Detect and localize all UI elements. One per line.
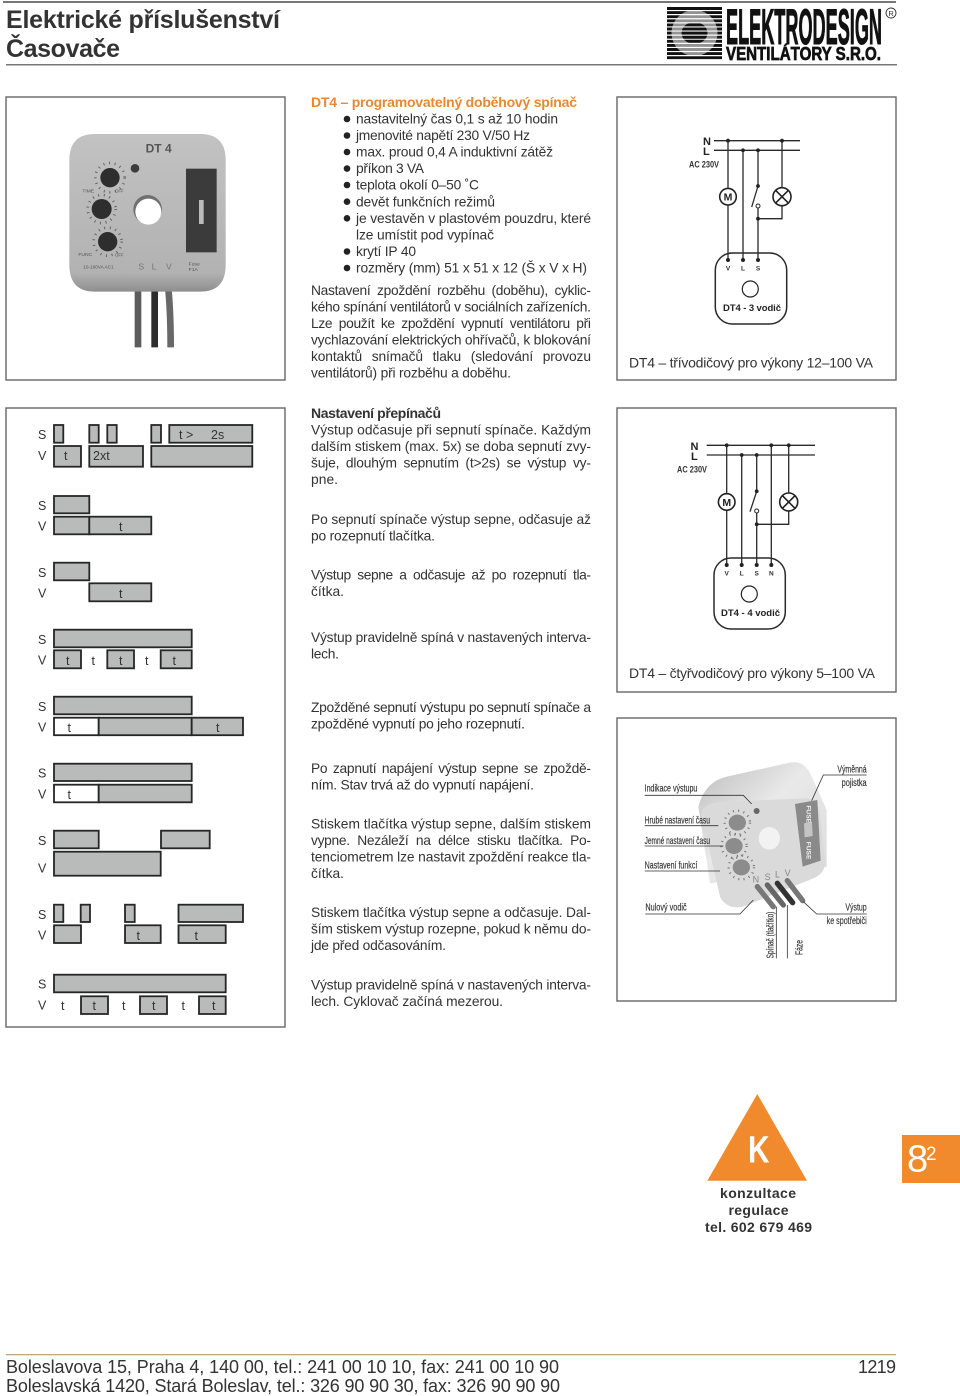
timing mode 1: 2xt [93, 449, 110, 463]
timing mode 2: t [119, 520, 123, 534]
text block: DT4 specifications: příkon 3 VA [356, 161, 425, 176]
page number: 1219 [858, 1357, 896, 1377]
diagram: junction dots [726, 139, 784, 262]
diagram: motor: M [722, 497, 731, 509]
timing mode 4: t [66, 654, 70, 668]
text block: DT4 specifications: Nastavení zpoždění rozběhu (doběhu), cyklic- [311, 283, 591, 298]
timing mode 9: V [38, 998, 47, 1012]
text block: switch settings descriptions: Nastavení přepínačů [311, 405, 441, 421]
timing mode 6 [38, 764, 192, 802]
panel: timing diagrams [6, 408, 285, 1027]
timing mode 4: t [145, 654, 149, 668]
timing mode 7: V [38, 862, 47, 876]
text block: DT4 specifications: lze umístit pod vypínač [356, 227, 494, 242]
text block: switch settings descriptions: tenciometrem lze nastavit zpoždění reakce tla- [311, 850, 591, 864]
photo: printed labels: FUNC [78, 252, 93, 258]
photo: printed labels: OFF [115, 189, 124, 194]
timing mode 8 [38, 905, 243, 943]
device: terminal letters: S [765, 872, 771, 882]
timing mode 5: V [38, 721, 47, 735]
device: terminal letters [753, 868, 791, 885]
text block: switch settings descriptions: čítka. [311, 584, 344, 599]
diagram: junction dots [725, 443, 791, 567]
timing mode 2: V [38, 520, 47, 534]
timing mode 3: V [38, 586, 47, 600]
callout labels: Výstup [845, 903, 867, 914]
text block: switch settings descriptions: Výstup pravidelně spíná v nastavených interva- [311, 978, 591, 992]
device: fuse markings [805, 805, 812, 860]
section tab 8.2: 8 [907, 1139, 928, 1181]
callout labels: Spínač (tlačítko) [765, 912, 776, 958]
timing mode 4: V [38, 654, 47, 668]
diagram: motor [720, 188, 736, 205]
device: fuse markings: FUSE [805, 842, 812, 860]
photo: printed labels: F1A [189, 267, 198, 273]
icon: orange triangle K: K [748, 1130, 770, 1172]
section tab 8.2: 2 [926, 1144, 937, 1165]
diagram: line labels: L [691, 451, 698, 463]
photo: printed labels: TIME [82, 188, 95, 194]
panel: annotated device [617, 718, 896, 1001]
callout labels: ke spotřebiči [827, 916, 867, 927]
contact text: konzultace [720, 1185, 796, 1201]
photo: wires [138, 273, 171, 347]
diagram: line labels: L [703, 146, 710, 158]
panel: wiring diagram 4-wire [617, 408, 896, 692]
timing mode 3 [38, 563, 151, 601]
callout labels: Fáze [795, 940, 806, 955]
timing mode 6: S [38, 766, 46, 780]
diagram: switch contact [755, 509, 759, 513]
diagram: switch contact [756, 204, 760, 208]
diagram: wires [707, 445, 815, 565]
diagram: DT4 3-wire unit: V [726, 266, 731, 272]
callout labels: Indikace výstupu [645, 784, 698, 795]
photo: printed labels [78, 142, 200, 273]
timing mode 5: t [68, 721, 72, 735]
title [6, 6, 281, 63]
timing mode 8: t [194, 929, 198, 943]
photo: centre hole [133, 195, 162, 225]
text block: switch settings descriptions: Zpožděné sepnutí výstupu po sepnutí spínače a [311, 700, 591, 715]
timing mode 3: S [38, 566, 46, 580]
timing mode 5: S [38, 700, 46, 714]
photo: device body [69, 134, 226, 292]
callout labels: Nastavení funkcí [645, 860, 697, 871]
timing mode 9 [38, 975, 226, 1014]
text block: switch settings descriptions: Stiskem tlačítka výstup sepne a odčasuje. Dal- [311, 905, 591, 920]
photo: knobs [92, 164, 139, 251]
text block: switch settings descriptions: ním. Stav trvá až do vypnutí napájení. [311, 778, 534, 792]
contact text: tel. 602 679 469 [705, 1219, 812, 1235]
timing mode 9: t [212, 999, 216, 1013]
timing mode 6: t [68, 788, 72, 802]
device: shell and face [698, 762, 827, 907]
photo: printed labels: V [166, 261, 172, 271]
diagram: line labels: N [703, 136, 711, 148]
photo: printed labels: DT 4 [146, 142, 172, 156]
callout labels [645, 765, 867, 958]
header: bottom rule [6, 64, 897, 66]
title: Elektrické příslušenství [6, 6, 281, 34]
footer rule [6, 1354, 896, 1355]
diagram: line labels: N [690, 441, 698, 453]
text block: DT4 specifications: teplota okolí 0–50 ˚C [356, 178, 479, 193]
contact text [705, 1185, 812, 1235]
diagram: line labels: AC 230V [689, 160, 720, 170]
callout labels: Jemné nastavení času [645, 836, 710, 847]
text block: switch settings descriptions: Stiskem tlačítka výstup sepne, dalším stiskem [311, 816, 591, 832]
logo: Elektrodesign: VENTILÁTORY S.R.O. [726, 43, 881, 64]
text block: DT4 specifications: vychlazování elektrických ohřívačů, k blokování [311, 333, 591, 348]
callout labels: Nulový vodič [645, 903, 687, 914]
text block: switch settings descriptions: vypne. Nezáleží na délce stisku tlačítka. Po- [311, 833, 591, 848]
timing mode 1: S [38, 428, 46, 442]
callout labels: Výměnná [837, 765, 867, 776]
diagram: DT4 4-wire unit [714, 558, 785, 629]
device: wires [757, 881, 803, 907]
text block: switch settings descriptions: po rozepnutí tlačítka. [311, 528, 435, 544]
timing mode 1 [38, 425, 252, 467]
diagram: motor [718, 494, 735, 510]
timing mode 4: t [92, 654, 96, 668]
diagram: DT4 4-wire unit: S [755, 570, 760, 578]
panel: wiring diagram 3-wire [617, 97, 896, 380]
diagram: line labels [677, 441, 708, 476]
text block: DT4 specifications: Lze použít ke zpoždění vypnutí ventilátoru při [311, 316, 591, 331]
text block: DT4 specifications: kontaktů snímačů tlaku (sledování provozu [311, 349, 591, 364]
timing mode 9: t [61, 999, 65, 1013]
text block: switch settings descriptions: ším stiskem výstup rozepne, pokud k němu do- [311, 922, 591, 936]
callout labels: pojistka [842, 778, 867, 789]
text block: switch settings descriptions: lech. [311, 646, 339, 662]
diagram: lamp [773, 188, 791, 206]
footer address [6, 1357, 560, 1396]
photo: printed labels: L [152, 261, 157, 271]
text block: switch settings descriptions: Po zapnutí napájení výstup sepne se zpoždě- [311, 761, 591, 776]
diagram: DT4 4-wire unit: L [740, 570, 744, 578]
diagram: DT4 4-wire unit: V [725, 570, 730, 578]
text block: switch settings descriptions: dalším stiskem (max. 5x) se doba sepnutí zvy- [311, 439, 591, 454]
diagram: lamp [780, 493, 798, 511]
spec bullets [344, 116, 350, 271]
timing mode 4: t [119, 654, 123, 668]
caption: DT4 – čtyřvodičový pro výkony 5–100 VA [629, 665, 876, 681]
text block: DT4 specifications: devět funkčních režimů [356, 194, 495, 209]
icon: orange triangle K [707, 1094, 807, 1181]
callout lines [645, 775, 867, 958]
text block: switch settings descriptions [310, 405, 591, 1009]
diagram: line labels [689, 136, 720, 170]
text block: DT4 specifications [311, 94, 591, 381]
photo: knob scales [88, 163, 125, 256]
text block: DT4 specifications: kého spínání ventilátorů v sociálních zařízeních. [311, 300, 591, 315]
text block: DT4 specifications: max. proud 0,4 A induktivní zátěž [356, 145, 553, 160]
device: fuse markings: FUSE [805, 805, 812, 824]
text block: DT4 specifications: ventilátorů) při rozběhu a doběhu. [311, 366, 511, 381]
title: Časovače [6, 33, 120, 63]
text block: DT4 specifications: jmenovité napětí 230 V/50 Hz [355, 128, 530, 143]
timing mode 2 [38, 496, 151, 534]
diagram: DT4 3-wire unit: L [741, 266, 745, 272]
timing mode 9: t [92, 999, 96, 1013]
header: top rule [3, 1, 896, 3]
contact text: regulace [728, 1202, 789, 1218]
text block: switch settings descriptions: zpožděné vypnutí po jeho rozepnutí. [311, 716, 525, 732]
diagram: motor: M [724, 192, 733, 204]
diagram: DT4 4-wire unit: N [769, 570, 774, 578]
timing mode 7: S [38, 834, 46, 848]
timing mode 8: S [38, 908, 46, 922]
diagram: DT4 4-wire unit: DT4 - 4 vodič [721, 608, 780, 619]
text block: switch settings descriptions: Po sepnutí spínače výstup sepne, odčasuje až [311, 512, 591, 527]
timing mode 5 [38, 697, 243, 735]
device: terminal letters: N [753, 875, 759, 885]
timing mode 1: t > [179, 428, 193, 442]
timing mode 8: V [38, 928, 47, 942]
device: terminal letters: L [775, 870, 780, 880]
timing mode 9: t [122, 999, 126, 1013]
timing mode 6: V [38, 788, 47, 802]
text block: switch settings descriptions: jde před odčasováním. [310, 938, 446, 953]
photo: fuse window [186, 169, 217, 252]
timing mode 9: t [152, 999, 156, 1013]
text block: DT4 specifications: DT4 – programovatelný doběhový spínač [311, 94, 577, 110]
photo: printed labels: S [138, 261, 144, 271]
footer address: Boleslavská 1420, Stará Boleslav, tel.: 326 90 90 30, fax: 326 90 90 90 [6, 1376, 560, 1396]
timing mode 2: S [38, 499, 46, 513]
diagram: wires [714, 141, 800, 260]
diagram: DT4 3-wire unit [715, 253, 787, 324]
text block: switch settings descriptions: Výstup sepne a odčasuje až po rozepnutí tla- [311, 568, 591, 582]
photo: printed labels: Fuse [189, 261, 200, 267]
panel: device photo DT4 [6, 97, 285, 380]
footer address: Boleslavova 15, Praha 4, 140 00, tel.: 241 00 10 10, fax: 241 00 10 90 [6, 1357, 559, 1377]
timing mode 7 [38, 831, 210, 876]
text block: DT4 specifications: rozměry (mm) 51 x 51 x 12 (Š x V x H) [356, 260, 587, 276]
timing mode 1: t [64, 449, 68, 463]
caption: DT4 – třívodičový pro výkony 12–100 VA [629, 354, 874, 370]
timing mode 8: t [136, 929, 140, 943]
timing mode 1: 2s [211, 428, 224, 442]
section tab 8.2 [902, 1135, 960, 1183]
timing mode 1: V [38, 449, 47, 463]
diagram: DT4 3-wire unit: S [756, 266, 761, 272]
device: terminal letters: V [785, 868, 791, 878]
callout labels: Hrubé nastavení času [645, 815, 710, 826]
text block: switch settings descriptions: Výstup odčasuje při sepnutí spínače. Každým [311, 422, 591, 438]
diagram: DT4 3-wire unit: DT4 - 3 vodič [723, 303, 781, 314]
photo: printed labels: OFF [115, 253, 124, 258]
timing mode 3: t [119, 587, 123, 601]
timing mode 4: t [172, 654, 176, 668]
timing mode 4: S [38, 633, 46, 647]
timing mode 9: S [38, 978, 46, 992]
text block: switch settings descriptions: pne. [311, 472, 338, 487]
logo: Elektrodesign [667, 7, 896, 60]
text block: switch settings descriptions: čítka. [311, 866, 344, 881]
text block: switch settings descriptions: Výstup pravidelně spíná v nastavených interva- [311, 630, 591, 645]
timing mode 9: t [182, 999, 186, 1013]
timing mode 4 [38, 630, 192, 668]
timing mode 5: t [216, 721, 220, 735]
photo: printed labels: 10-160VA AC1 [83, 264, 114, 269]
text block: DT4 specifications: krytí IP 40 [356, 244, 416, 259]
text block: DT4 specifications: nastavitelný čas 0,1 s až 10 hodin [356, 112, 558, 127]
text block: DT4 specifications: je vestavěn v plastovém pouzdru, které [355, 211, 591, 226]
logo: Elektrodesign: R [888, 9, 894, 18]
diagram: line labels: AC 230V [677, 464, 708, 476]
text block: switch settings descriptions: šuje, dlouhým sepnutím (t>2s) se výstup vy- [311, 456, 591, 470]
text block: switch settings descriptions: lech. Cyklovač začíná mezerou. [311, 994, 503, 1009]
